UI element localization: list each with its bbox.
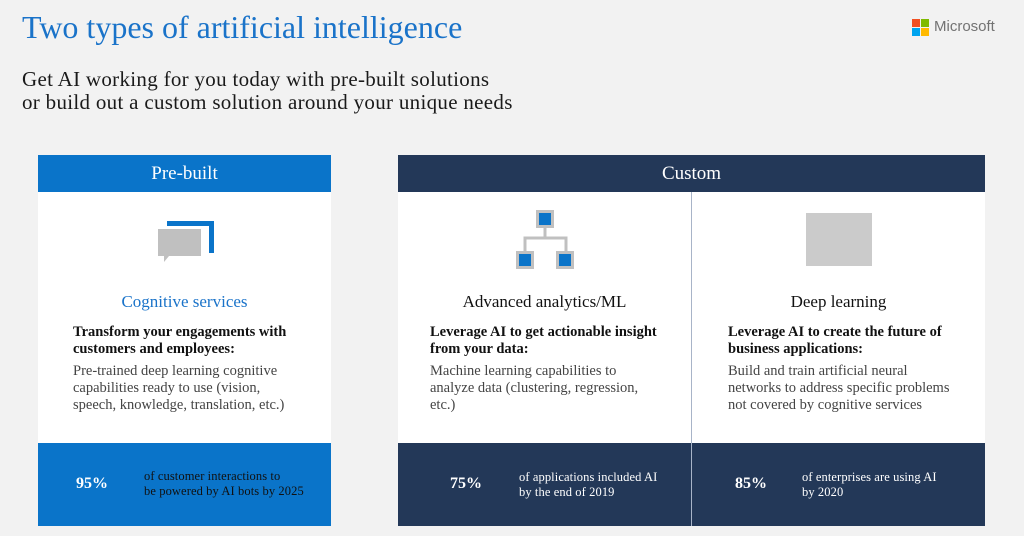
stat: 75%	[398, 443, 691, 526]
stat: 95%	[38, 443, 331, 526]
panel: custom	[398, 155, 985, 526]
text: analytics: Machine learning capabilities to analyze data (clustering, regression, etc.)	[430, 363, 638, 413]
text: cognitive services: Transform your engagements with customers and employees:	[73, 324, 286, 357]
text: cognitive services	[73, 324, 286, 413]
text: deep learning	[728, 324, 949, 413]
stat: 75%: by the end of 2019	[519, 485, 615, 499]
text: analytics	[430, 324, 657, 413]
title: Two types of artificial intelligence	[22, 9, 462, 45]
header: custom: Custom	[662, 163, 721, 184]
stat: 75%: 75%	[450, 475, 482, 492]
icon: org chart	[516, 210, 574, 269]
stat: 85%: 85%	[735, 475, 767, 492]
stat: 75%: of applications included AI	[519, 470, 657, 484]
stat: 95%: 95%	[76, 475, 108, 492]
heading: cognitive services: Cognitive services	[121, 292, 248, 311]
stat: 95%: of customer interactions to	[144, 469, 280, 483]
header: pre-built	[38, 155, 331, 192]
icon: chat bubbles	[158, 221, 214, 262]
header: pre-built: Pre-built	[151, 163, 218, 184]
icon: grey square	[806, 213, 872, 266]
logo: Microsoft: Microsoft	[934, 18, 995, 35]
heading: deep learning: Deep learning	[791, 292, 886, 311]
stat: 95%: be powered by AI bots by 2025	[144, 484, 304, 498]
stat: 85%: by 2020	[802, 485, 843, 499]
subtitle: or build out a custom solution around your unique needs	[22, 90, 513, 114]
heading: advanced analytics: Advanced analytics/ML	[463, 292, 626, 311]
text: analytics: Leverage AI to get actionable insight from your data:	[430, 324, 657, 357]
stat: 85%	[692, 443, 985, 526]
logo: Microsoft	[912, 18, 995, 36]
header: custom	[398, 155, 985, 192]
text: deep learning: Build and train artificial neural networks to address specific problems not covered by cognitive services	[728, 363, 949, 413]
text: cognitive services: Pre-trained deep learning cognitive capabilities ready to use (vision, speech, knowledge, translation, etc.)	[73, 363, 284, 413]
text: deep learning: Leverage AI to create the future of business applications:	[728, 324, 942, 357]
subtitle: Get AI working for you today with pre-built solutions	[22, 67, 489, 91]
subtitle	[22, 67, 513, 114]
panel: pre-built	[38, 155, 331, 526]
stat: 85%: of enterprises are using AI	[802, 470, 937, 484]
